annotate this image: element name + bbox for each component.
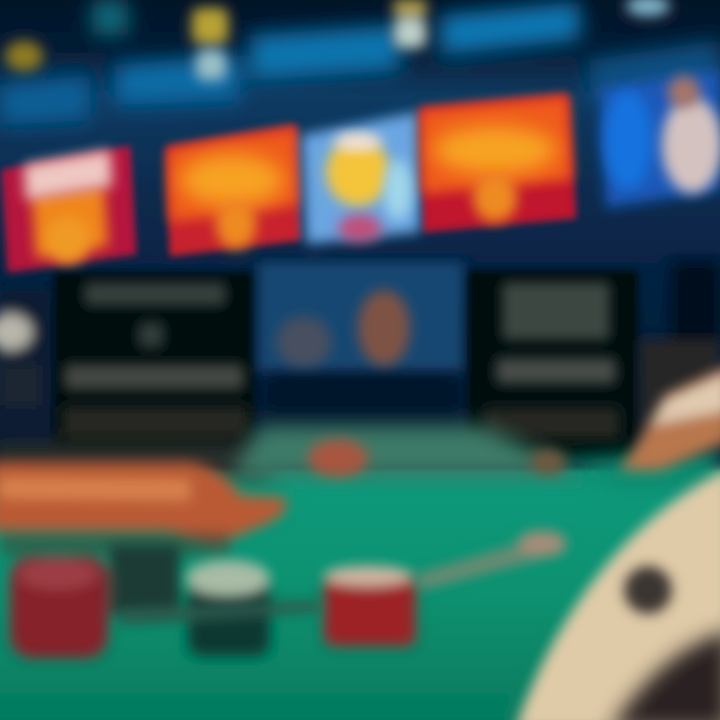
screen: large right xyxy=(420,94,576,232)
cue stick: pointing to right xyxy=(120,531,566,625)
top light bands xyxy=(0,0,720,125)
panel: dark sign left xyxy=(54,272,254,450)
card: beige curved shape xyxy=(515,468,720,720)
panel: centre photo sign xyxy=(258,262,463,425)
chip stack: red left xyxy=(10,545,180,658)
screen: character centre xyxy=(302,112,420,244)
screen: far right figure xyxy=(600,70,720,208)
ceiling lights xyxy=(5,0,670,80)
arm: left hand xyxy=(0,462,287,556)
screen: second xyxy=(166,125,300,256)
panel: dark sign right xyxy=(468,270,638,460)
panel: far right dark sign xyxy=(640,262,720,450)
chip: floating token on table xyxy=(308,439,368,477)
chip stack: green centre xyxy=(186,560,270,656)
table: green felt xyxy=(0,425,720,720)
background: upper wall xyxy=(0,0,720,470)
hand: right xyxy=(530,365,720,475)
panel: left edge sign xyxy=(0,290,50,430)
screen: far left xyxy=(2,146,136,272)
chip stack: red right xyxy=(324,566,416,646)
